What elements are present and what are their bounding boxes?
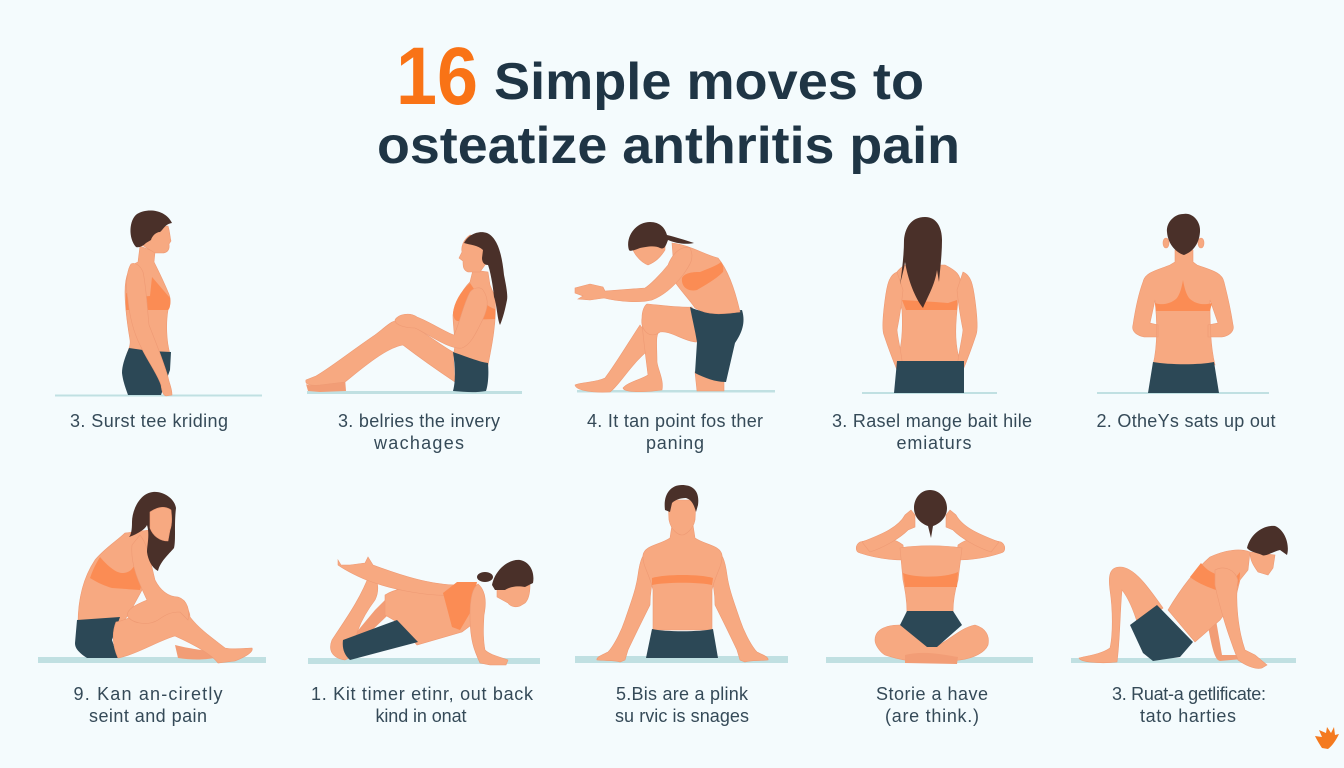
figure: woman on hands and knee reaching to foot [331, 557, 533, 665]
panel: exercise 5 standing back view hands on hips [1096, 214, 1276, 431]
caption: 9. Kan an-ciretly [74, 684, 222, 704]
caption: Storie a have [876, 684, 988, 704]
figure: seated woman holding knee [75, 492, 252, 663]
figure: man from behind [1133, 214, 1233, 393]
panel: exercise 1 standing side view [55, 211, 262, 431]
caption: 3. Rasel mange bait hile [832, 411, 1032, 431]
figure: cross-legged person hands behind head [856, 490, 1005, 664]
caption: kind in onat [376, 706, 466, 726]
figure: kneeling woman reaching forward [575, 222, 744, 392]
caption: 3. belries the invery [338, 411, 500, 431]
caption: 1. Kit timer etinr, out back [311, 684, 534, 704]
caption: (are think.) [885, 706, 979, 726]
caption: 3. Ruat-a getlificate: [1112, 684, 1266, 704]
caption: emiaturs [896, 433, 972, 453]
figure: person seated leaning onto hands [1079, 526, 1288, 668]
caption: 3. Surst tee kriding [70, 411, 228, 431]
caption: tato harties [1140, 706, 1236, 726]
title [377, 31, 960, 175]
panel: exercise 7 all fours leg raise [308, 557, 540, 726]
caption: seint and pain [89, 706, 207, 726]
caption: 5.Bis are a plink [616, 684, 749, 704]
title: Simple moves to [494, 53, 924, 111]
figure: man seated facing forward [597, 485, 768, 662]
panel: exercise 4 standing back view [832, 217, 1032, 453]
figure: seated woman in profile [306, 232, 507, 392]
panel: exercise 2 seated with knees bent [306, 232, 522, 453]
caption: 4. It tan point fos ther [587, 411, 763, 431]
caption: 2. OtheYs sats up out [1096, 411, 1276, 431]
figure: standing person in profile [122, 211, 172, 396]
panel: exercise 10 seated leaning forward [1071, 526, 1296, 726]
title: 16 [396, 31, 478, 122]
panel: exercise 8 seated front view arms down [575, 485, 788, 726]
caption: su rvic is snages [615, 706, 749, 726]
panel: exercise 3 kneeling forward reach [575, 222, 775, 453]
caption: paning [646, 433, 704, 453]
icon: orange hand mark [1315, 727, 1339, 749]
caption: wachages [373, 433, 464, 453]
panel: exercise 6 seated holding shin [38, 492, 266, 726]
figure: woman from behind with long hair [883, 217, 977, 393]
title: osteatize anthritis pain [377, 117, 960, 175]
panel: exercise 9 cross-legged back view [826, 490, 1033, 726]
